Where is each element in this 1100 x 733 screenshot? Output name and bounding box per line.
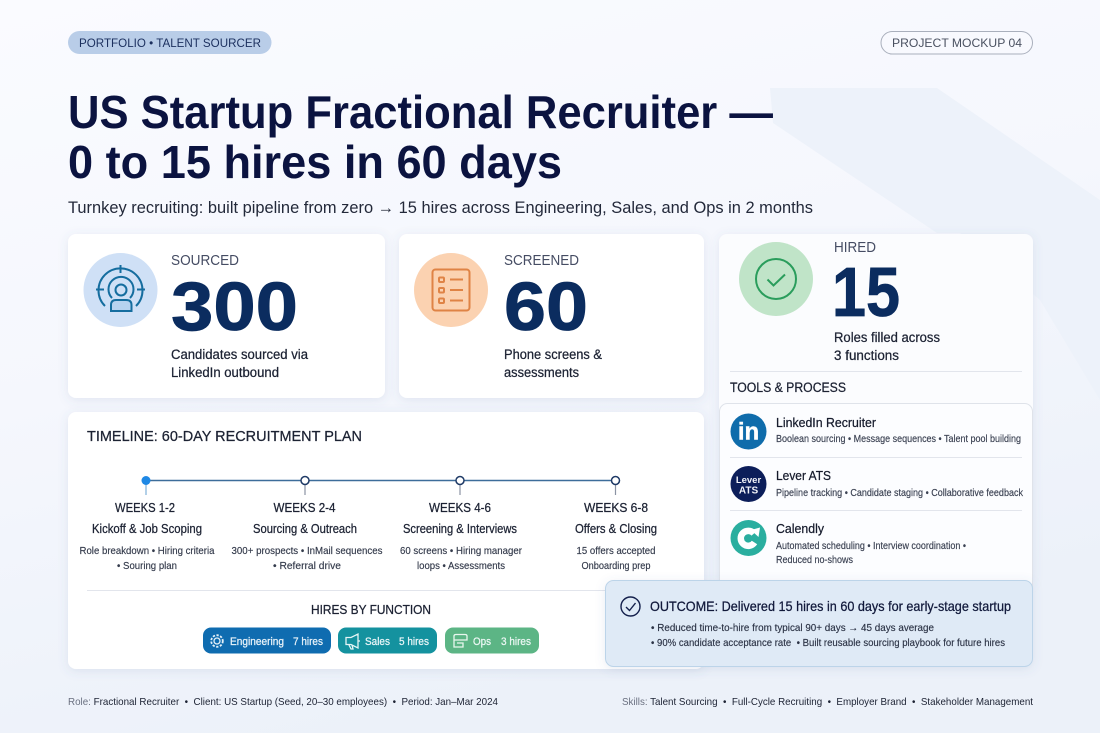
callout: outcome: • 90% candidate acceptance rate • Built reusable sourcing playbook for future hires xyxy=(651,637,1005,649)
panel: sourced: SOURCED xyxy=(171,253,239,269)
panel: screened: Phone screens & xyxy=(504,347,602,362)
pill: ops: Ops xyxy=(473,636,491,648)
tool: lever ats: Pipeline tracking • Candidate staging • Collaborative feedback xyxy=(776,487,1024,499)
step: weeks 2-4 xyxy=(232,501,382,572)
pill: engineering: Engineering xyxy=(230,636,284,648)
tool: calendly: Automated scheduling • Interview coordination • xyxy=(776,540,966,552)
panel: sourced xyxy=(68,234,385,398)
panel: timeline xyxy=(68,412,704,669)
title xyxy=(68,86,773,188)
panel: sourced: Candidates sourced via xyxy=(171,347,308,362)
step: weeks 1-2: Kickoff & Job Scoping xyxy=(92,522,202,536)
panel: screened: SCREENED xyxy=(504,253,579,269)
panel: hired and tools xyxy=(719,234,1033,594)
callout: outcome: • Reduced time-to-hire from typical 90+ days → 45 days average xyxy=(651,622,934,634)
title: 0 to 15 hires in 60 days xyxy=(68,136,562,188)
icon: outcome check xyxy=(621,597,640,616)
tool: linkedin recruiter: in xyxy=(738,418,759,446)
callout: outcome: OUTCOME: Delivered 15 hires in 60 days for early-stage startup xyxy=(650,598,1011,614)
step: weeks 4-6 xyxy=(400,501,522,572)
tag: portfolio label xyxy=(68,31,272,54)
tag: portfolio label: PORTFOLIO • TALENT SOURCER xyxy=(79,36,261,50)
step: weeks 4-6: 60 screens • Hiring manager xyxy=(400,545,522,557)
step: weeks 4-6: loops • Assessments xyxy=(417,560,505,572)
tag: project mockup xyxy=(881,32,1032,54)
tag: project mockup: PROJECT MOCKUP 04 xyxy=(892,36,1022,50)
step: weeks 1-2 xyxy=(80,501,215,572)
pill: ops xyxy=(445,628,539,654)
step: weeks 2-4: 300+ prospects • InMail sequences xyxy=(232,545,382,557)
panel: screened: 60 xyxy=(504,268,588,345)
icon: target person xyxy=(84,253,158,327)
footer: skills: Skills: Talent Sourcing • Full-Cycle Recruiting • Employer Brand • Stakeholder Management xyxy=(622,696,1033,708)
step: weeks 6-8: 15 offers accepted xyxy=(576,545,656,557)
step: weeks 2-4: Sourcing & Outreach xyxy=(253,522,357,536)
tool: calendly: Calendly xyxy=(776,521,824,536)
step: weeks 2-4: WEEKS 2-4 xyxy=(274,501,336,515)
panel: hired and tools: 15 xyxy=(832,253,900,331)
tool: lever ats xyxy=(730,466,1024,502)
step: weeks 1-2: WEEKS 1-2 xyxy=(115,501,175,515)
step: weeks 2-4: • Referral drive xyxy=(273,560,341,572)
step: weeks 4-6: Screening & Interviews xyxy=(403,522,517,536)
panel: hired and tools: HIRED xyxy=(834,240,876,256)
tool: linkedin recruiter xyxy=(730,414,1021,450)
panel: sourced: 300 xyxy=(171,268,298,345)
timeline track xyxy=(142,476,620,495)
panel: screened: assessments xyxy=(504,365,579,380)
step: weeks 6-8: Onboarding prep xyxy=(582,560,651,572)
panel: screened xyxy=(399,234,704,398)
panel: hired and tools: 3 functions xyxy=(834,348,899,363)
tool: calendly: Reduced no-shows xyxy=(776,554,853,566)
step: weeks 1-2: • Souring plan xyxy=(117,560,177,572)
panel: hired and tools: Roles filled across xyxy=(834,330,940,345)
subtitle: Turnkey recruiting: built pipeline from zero → 15 hires across Engineering, Sales, and Ops in 2 months xyxy=(68,199,813,217)
step: weeks 6-8 xyxy=(575,501,657,572)
panel: sourced: LinkedIn outbound xyxy=(171,365,279,380)
step: weeks 6-8: Offers & Closing xyxy=(575,522,657,536)
step: weeks 4-6: WEEKS 4-6 xyxy=(429,501,491,515)
heading: timeline: TIMELINE: 60-DAY RECRUITMENT PLAN xyxy=(87,429,362,445)
heading: tools and process: TOOLS & PROCESS xyxy=(730,380,846,395)
pill: engineering: 7 hires xyxy=(293,636,323,648)
footer: project details: Role: Fractional Recruiter • Client: US Startup (Seed, 20–30 employees) • Period: Jan–Mar 2024 xyxy=(68,696,498,708)
callout: outcome xyxy=(606,580,1032,666)
title: US Startup Fractional Recruiter — xyxy=(68,86,773,138)
tool: linkedin recruiter: Boolean sourcing • Message sequences • Talent pool building xyxy=(776,433,1021,445)
pill: engineering xyxy=(203,628,331,654)
tool: lever ats: Lever xyxy=(736,475,761,486)
tool: calendly xyxy=(730,520,966,566)
step: weeks 1-2: Role breakdown • Hiring criteria xyxy=(80,545,215,557)
step: weeks 6-8: WEEKS 6-8 xyxy=(584,501,648,515)
tool: lever ats: ATS xyxy=(739,486,758,496)
panel: tools list xyxy=(720,404,1032,594)
heading: hires by function: HIRES BY FUNCTION xyxy=(311,603,431,617)
pill: sales: Sales xyxy=(365,636,390,648)
icon: checklist xyxy=(414,253,488,327)
icon: check circle xyxy=(739,242,813,316)
pill: sales xyxy=(338,628,437,654)
pill: ops: 3 hires xyxy=(501,636,531,648)
tool: lever ats: Lever ATS xyxy=(776,468,831,483)
tool: linkedin recruiter: LinkedIn Recruiter xyxy=(776,415,877,430)
pill: sales: 5 hires xyxy=(399,636,429,648)
